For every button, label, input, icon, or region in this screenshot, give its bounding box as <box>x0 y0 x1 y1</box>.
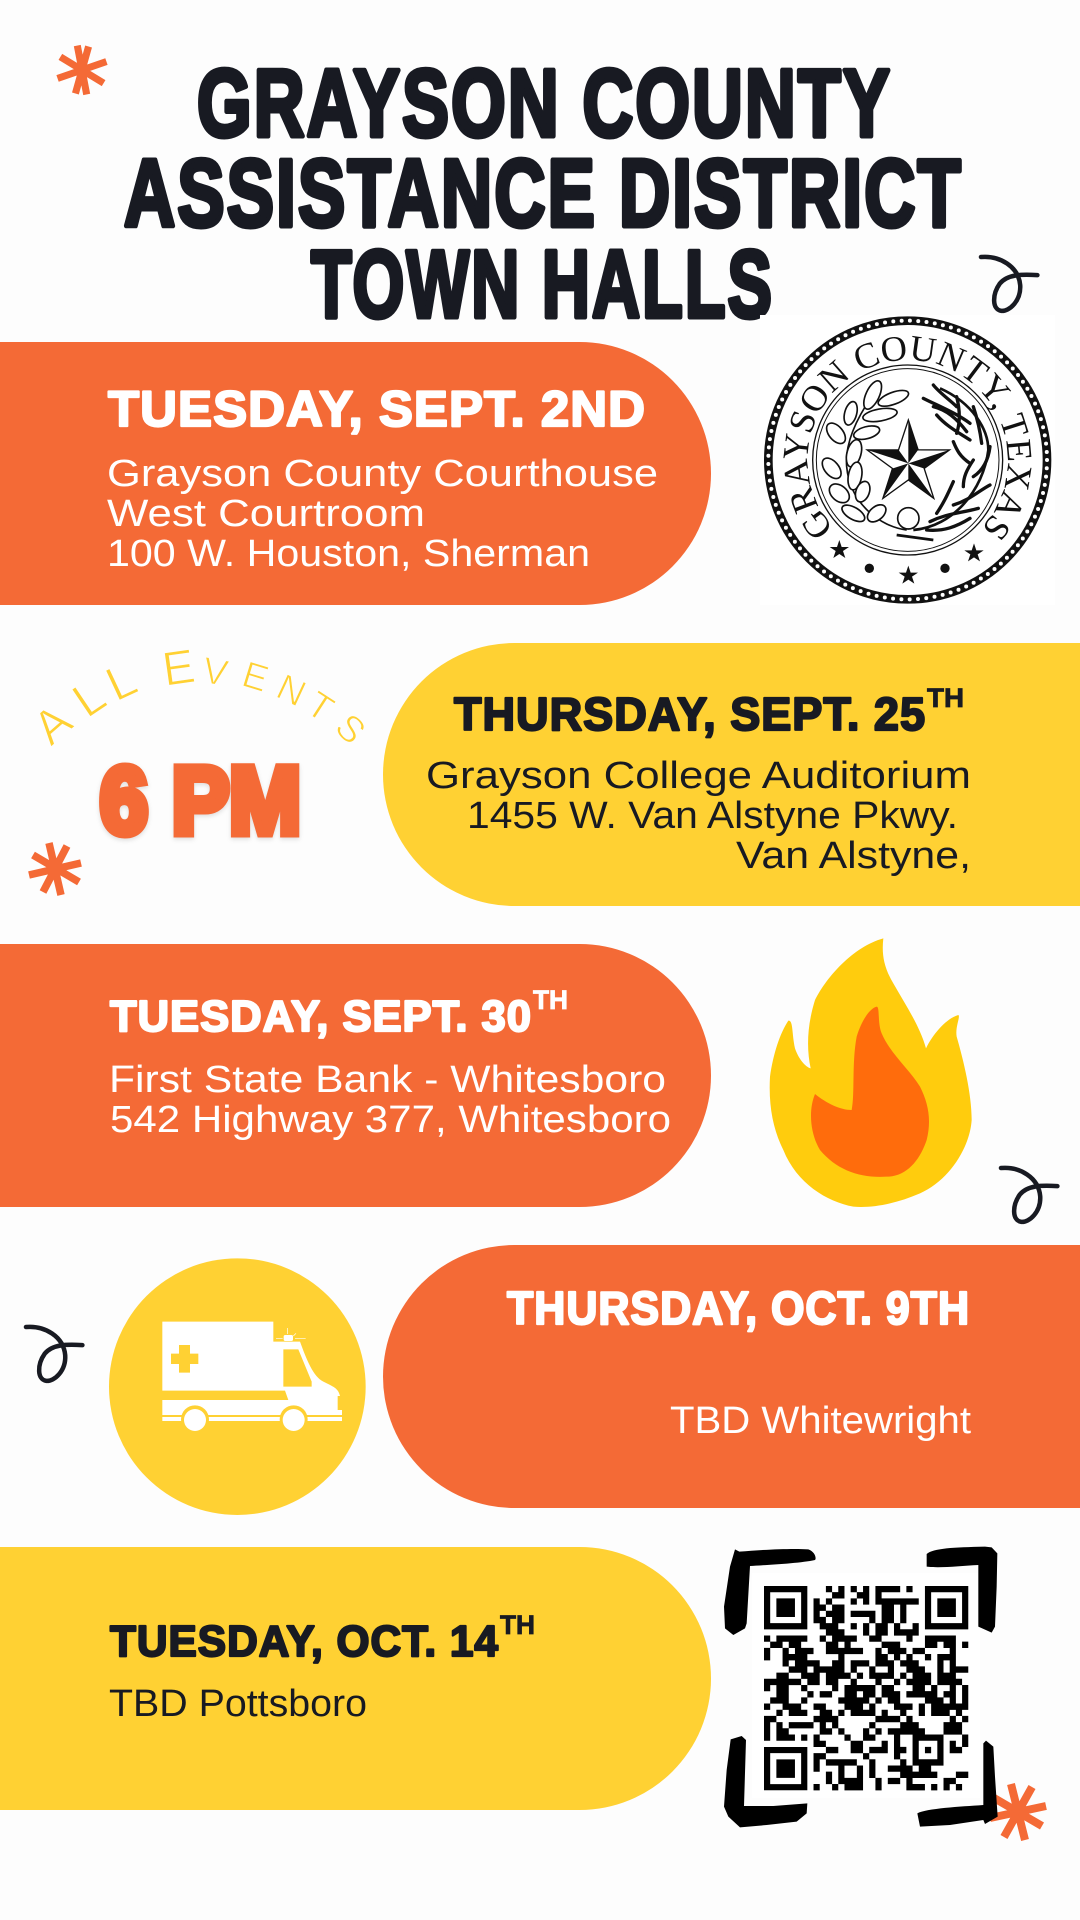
panel: Tuesday Oct 14th: TUESDAY, OCT. 14 <box>110 1617 499 1666</box>
panel: Tuesday Sept 2nd: West Courtroom <box>107 493 425 535</box>
QR code with brush brackets <box>724 1547 998 1827</box>
panel: Tuesday Oct 14th: TH <box>500 1610 535 1640</box>
panel: Thursday Sept 25th: THURSDAY, SEPT. 25 <box>454 688 926 740</box>
panel: Tuesday Sept 30th: 542 Highway 377, Whitesboro <box>110 1099 671 1141</box>
panel: Tuesday Sept 2nd: TUESDAY, SEPT. 2ND <box>108 381 646 437</box>
text: All Events curved: E <box>159 640 198 697</box>
panel: Tuesday Sept 2nd: 100 W. Houston, Sherman <box>107 533 590 575</box>
panel: Thursday Sept 25th: 1455 W. Van Alstyne Pkwy. <box>467 795 958 837</box>
panel: Thursday Oct 9th: THURSDAY, OCT. 9TH <box>507 1282 970 1334</box>
panel: Thursday Sept 25th: Grayson College Auditorium <box>426 755 971 797</box>
title <box>124 50 963 338</box>
panel: Tuesday Sept 30th: TUESDAY, SEPT. 30 <box>110 992 532 1041</box>
icon: squiggle near ambulance <box>26 1327 82 1381</box>
icon: Grayson County seal: GRAYSON COUNTY, TEXAS <box>783 336 1032 540</box>
icon: Grayson County seal <box>760 315 1052 604</box>
icon: asterisk bottom right <box>990 1784 1046 1840</box>
text: All Events curved: ALL <box>23 648 153 755</box>
text: 6 PM: 6 PM <box>100 748 301 854</box>
icon: asterisk left <box>29 843 81 895</box>
text: All Events curved: VENTS <box>200 650 374 752</box>
panel: Thursday Sept 25th: TH <box>927 683 964 713</box>
panel: Tuesday Sept 30th: First State Bank - Whitesboro <box>109 1059 666 1101</box>
icon: squiggle near flame <box>1001 1168 1057 1222</box>
icon: flame <box>770 938 972 1207</box>
panel: Tuesday Sept 2nd: Grayson County Courthouse <box>107 453 658 495</box>
panel: Thursday Sept 25th <box>383 643 1080 906</box>
panel: Tuesday Sept 2nd <box>0 342 711 605</box>
panel: Tuesday Oct 14th: TBD Pottsboro <box>109 1683 367 1725</box>
panel: Tuesday Oct 14th <box>0 1547 711 1810</box>
panel: Thursday Oct 9th <box>383 1245 1080 1508</box>
panel: Thursday Sept 25th: Van Alstyne, <box>736 835 971 877</box>
panel: Tuesday Sept 30th: TH <box>533 985 568 1015</box>
panel: Thursday Oct 9th: TBD Whitewright <box>670 1400 971 1442</box>
icon: ambulance in yellow circle <box>109 1258 366 1515</box>
icon: squiggle near title <box>981 257 1037 311</box>
title: TOWN HALLS <box>311 231 774 338</box>
panel: Tuesday Sept 30th <box>0 944 711 1207</box>
icon: asterisk top left <box>58 46 106 94</box>
